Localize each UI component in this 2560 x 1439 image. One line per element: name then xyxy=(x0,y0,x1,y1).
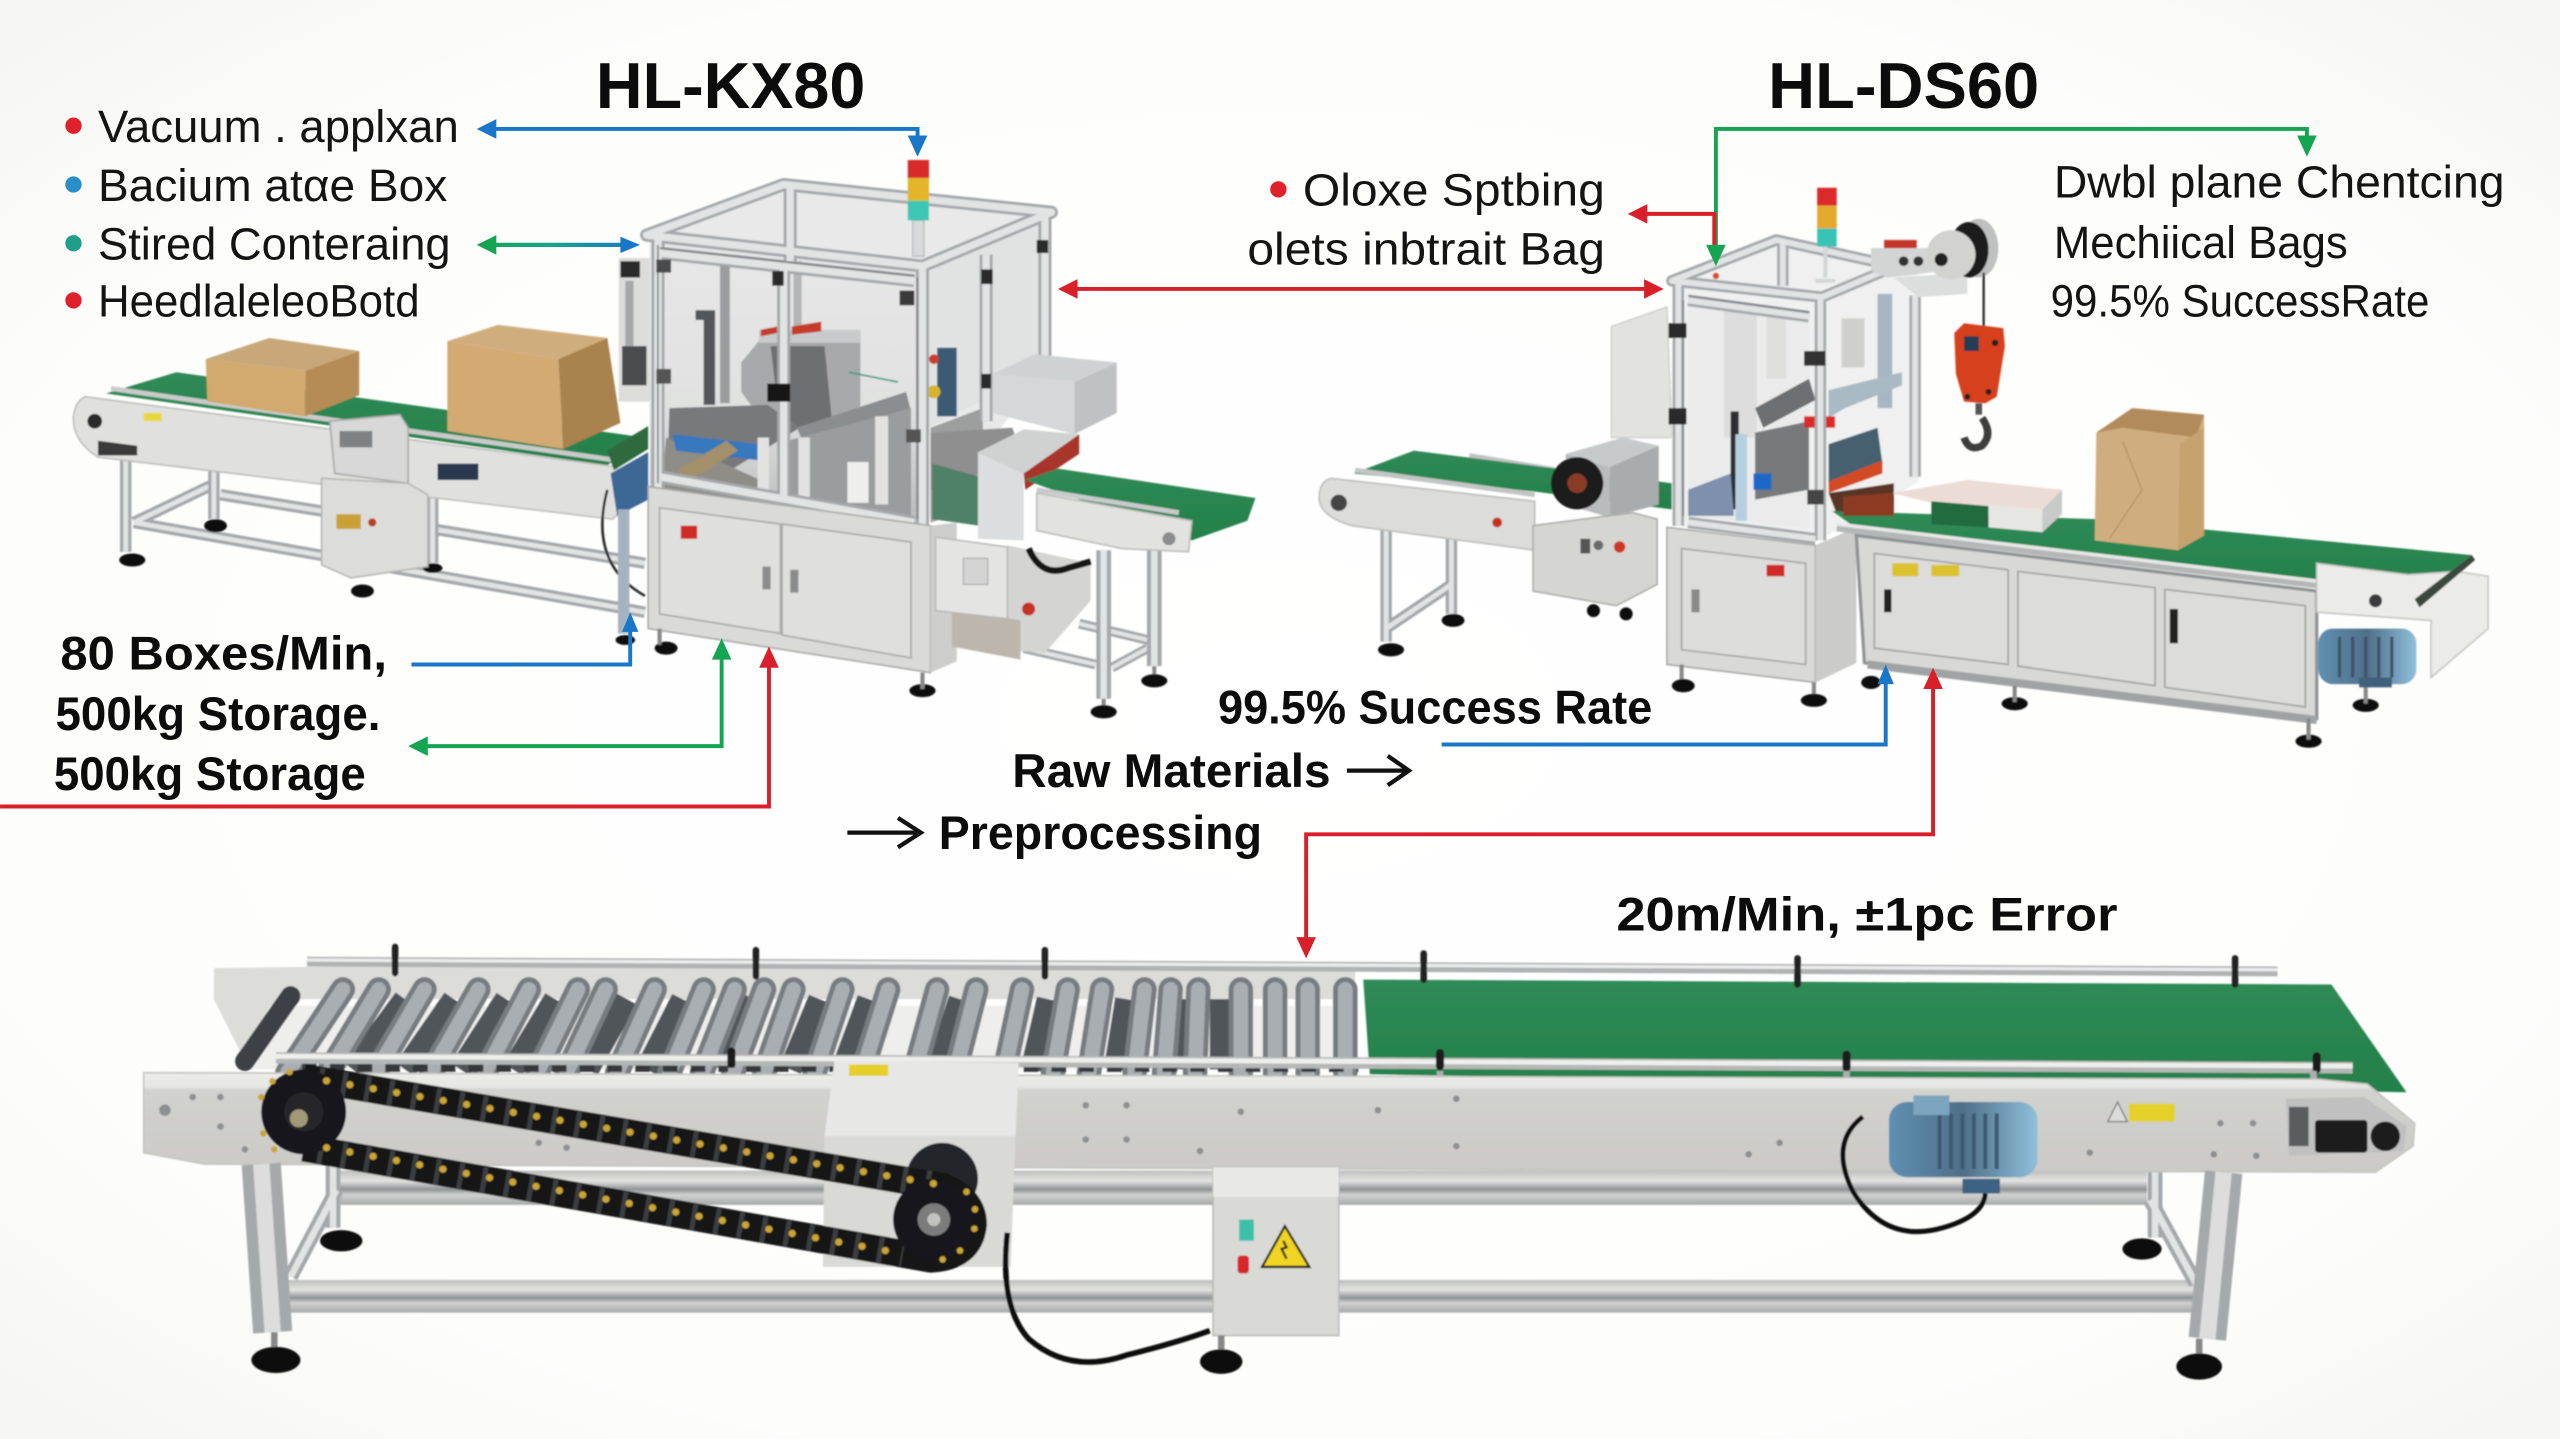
warning label xyxy=(2108,1102,2175,1122)
rollers xyxy=(245,989,1345,1073)
infeed conveyor body xyxy=(73,389,624,519)
cardboard box large xyxy=(447,325,620,449)
drive motor xyxy=(2318,629,2416,687)
motor cable xyxy=(1843,1117,1985,1232)
feature list: HL-KX80: Bacium atαe Βox xyxy=(98,160,447,211)
front guide rail xyxy=(276,1051,2353,1127)
green belt xyxy=(1363,980,2407,1092)
rear rollers xyxy=(353,999,1221,1069)
control panel box xyxy=(1200,1167,1339,1374)
arrow: blue to Vacuum line and stack light xyxy=(477,119,927,157)
specs: HL-KX80: 80 Boxes/Min, xyxy=(60,627,387,680)
arrow: blue from 80 Boxes/Min xyxy=(411,612,638,664)
lower frame rails xyxy=(281,1171,2199,1313)
feature list: HL-DS60 right: 99.5% SuccessRate xyxy=(2051,276,2429,327)
arrow: green across HL-DS60 xyxy=(1706,129,2317,266)
centre gear housing xyxy=(823,1061,1019,1267)
enclosure glass xyxy=(1672,240,1918,540)
main cabinet xyxy=(1667,527,1856,707)
conveyor side body xyxy=(144,1073,2415,1172)
infeed conveyor body xyxy=(1319,470,1535,550)
rear guide rail xyxy=(307,947,2278,984)
long cabinet xyxy=(1837,524,2379,748)
roller bed back frame xyxy=(214,967,1355,1069)
specs: HL-KX80: 500kg Storage xyxy=(54,748,366,801)
enclosure frame xyxy=(1669,240,1915,540)
stack light xyxy=(908,160,929,256)
packed cartons on belt xyxy=(1843,480,2062,532)
arrow: green-blue double between list and enclosure xyxy=(477,235,640,255)
feature list: HL-DS60 left: Oloxe Sptbing xyxy=(1303,165,1605,216)
infeed conveyor legs xyxy=(1378,456,1567,656)
internal mechanism xyxy=(661,260,983,522)
title: HL-DS60: HL-DS60 xyxy=(1768,49,2039,122)
feature list: HL-DS60 right: Mechiical Bags xyxy=(2054,217,2348,268)
feature list: HL-KX80: Vacuum . applxan xyxy=(98,101,459,152)
feature list: HL-DS60 right xyxy=(2051,157,2504,327)
cardboard box small xyxy=(206,338,359,416)
silver top box xyxy=(993,354,1117,434)
motor xyxy=(1889,1095,2038,1193)
machine: roller and belt conveyor xyxy=(144,947,2415,1380)
feature list: HL-KX80 xyxy=(65,101,459,327)
arrow: red between conveyor and HL-DS60 xyxy=(1296,668,1943,958)
infeed conveyor frame rails xyxy=(119,441,645,612)
left power cable xyxy=(1006,1233,1210,1362)
side column and cables xyxy=(602,258,650,645)
roller gap shadow xyxy=(302,1065,1358,1070)
arrow: red from left edge to cabinet xyxy=(0,647,779,807)
spec: success rate: 99.5% Success Rate xyxy=(1218,681,1652,734)
rear cabinet xyxy=(1611,307,1672,438)
arrow: green to 500kg Storage xyxy=(408,638,731,756)
infeed control box xyxy=(322,415,428,578)
arrow: blue from Success Rate xyxy=(1442,664,1894,744)
drag chain xyxy=(261,1069,976,1260)
arrow: red double between machines xyxy=(1058,279,1664,299)
kraft paper bag xyxy=(2095,408,2204,550)
feature list: HL-DS60 left: olets inbtrait Bag xyxy=(1247,223,1605,274)
rear legs xyxy=(291,1164,2196,1283)
hoist arm and pulley xyxy=(1871,219,1998,327)
red hoist hook xyxy=(1954,323,2005,448)
process label: preprocessing: Preprocessing xyxy=(939,807,1262,860)
arrow: preprocessing xyxy=(847,818,921,847)
main cabinet xyxy=(648,487,957,697)
infeed belt xyxy=(1353,451,1672,509)
machine: HL-KX80 box packer line xyxy=(73,160,1256,718)
machine: HL-DS60 bag packer line xyxy=(1319,188,2488,748)
feature list: HL-DS60 right: Dwbl plane Chentcing xyxy=(2054,157,2504,208)
stack light xyxy=(1816,188,1837,281)
long belt conveyor xyxy=(1832,511,2472,599)
arrow: red to Oloxe list xyxy=(1628,204,1714,245)
feature list: HL-KX80: HeedlaleleoBotd xyxy=(98,276,420,327)
spec: conveyor speed: 20m/Min, ±1pc Error xyxy=(1616,889,2118,942)
process label: raw materials: Raw Materials xyxy=(1012,745,1331,798)
feature list: HL-DS60 left xyxy=(1247,165,1605,274)
conveyor head end xyxy=(2317,555,2488,678)
feature list: HL-KX80: Stired Conteraing xyxy=(98,219,451,270)
outfeed section xyxy=(931,428,1256,718)
rear drag chain wheel xyxy=(906,1143,978,1215)
specs: HL-KX80: 500kg Storage. xyxy=(56,688,380,741)
enclosure frame xyxy=(647,184,1051,527)
internal mechanism xyxy=(1688,294,1902,521)
gear box xyxy=(1551,438,1659,518)
title: HL-KX80: HL-KX80 xyxy=(596,49,865,122)
infeed green belt xyxy=(106,372,645,465)
front legs xyxy=(251,1164,2224,1380)
end drive head xyxy=(2286,1097,2407,1156)
control box xyxy=(1533,513,1657,620)
arrow: raw materials xyxy=(1347,756,1409,785)
specs: HL-KX80 xyxy=(54,627,387,801)
main enclosure glass xyxy=(650,184,1051,526)
